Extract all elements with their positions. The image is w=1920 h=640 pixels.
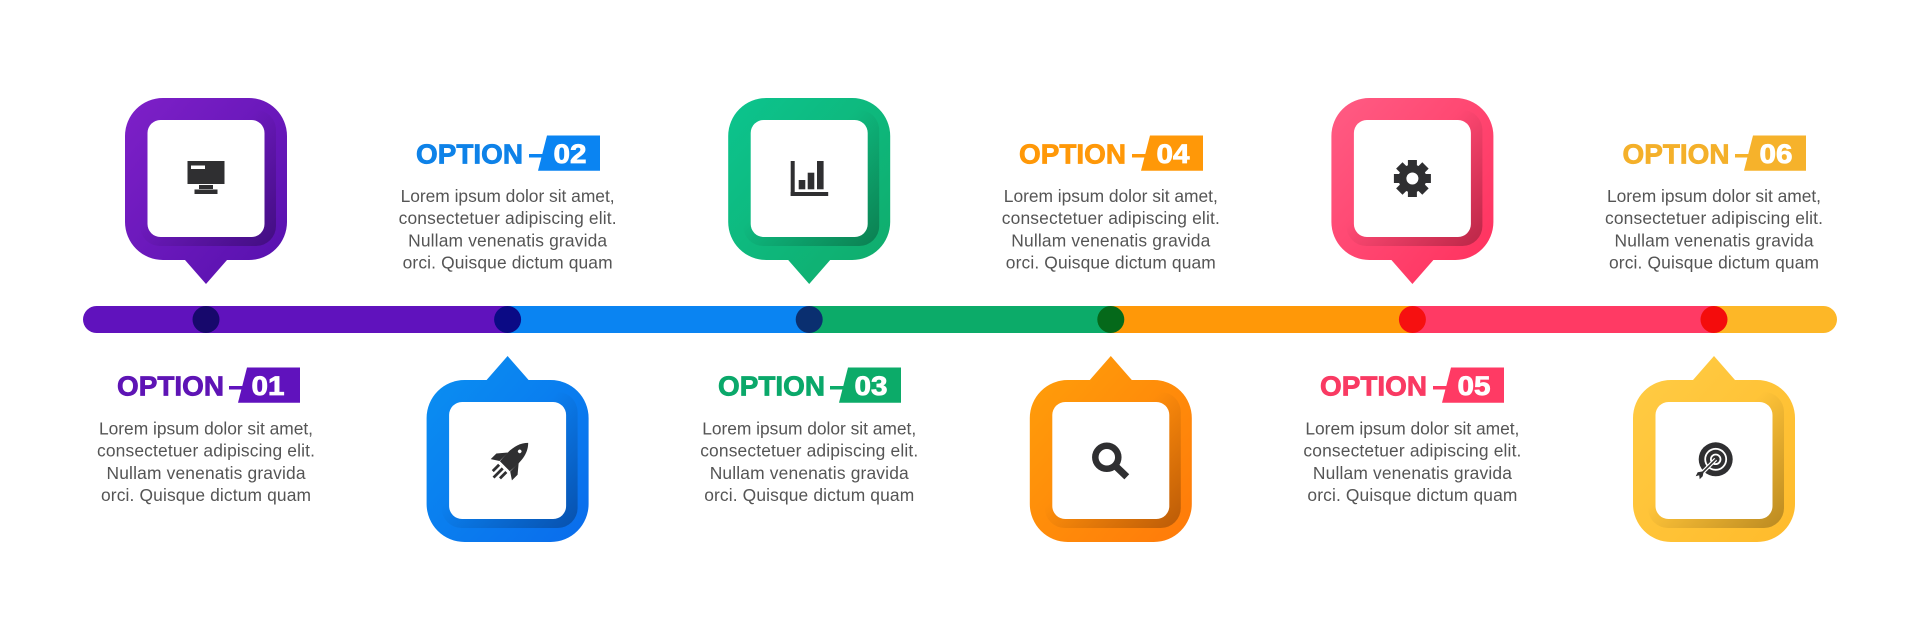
text block: option 02: Lorem ipsum dolor sit amet, xyxy=(401,186,615,206)
white card xyxy=(449,402,566,519)
text block: option 01: consectetuer adipiscing elit. xyxy=(97,441,315,461)
timeline marker 4 xyxy=(1097,306,1124,333)
pin shape xyxy=(1331,98,1493,284)
label: option 03 xyxy=(718,368,901,403)
text block: option 06: Lorem ipsum dolor sit amet, xyxy=(1607,186,1821,206)
number ribbon 04 xyxy=(1141,136,1203,171)
white card xyxy=(1052,402,1169,519)
panel: option 06 bubble xyxy=(1633,356,1795,542)
icon: rocket xyxy=(483,432,539,488)
panel: option 05 bubble xyxy=(1331,98,1493,284)
white card xyxy=(1656,402,1772,519)
text block: option 05 xyxy=(1303,418,1521,505)
connector dash 01 xyxy=(229,386,245,390)
text block: option 02: Nullam venenatis gravida xyxy=(408,230,607,250)
icon: gear xyxy=(1394,160,1431,197)
inner shadow xyxy=(743,110,879,246)
pin shape xyxy=(728,98,890,284)
label: option 04 xyxy=(1019,136,1203,171)
white card xyxy=(148,120,264,237)
text block: option 05: Nullam venenatis gravida xyxy=(1313,463,1512,483)
number ribbon 06 xyxy=(1744,136,1806,171)
panel: option 04 bubble xyxy=(1030,356,1192,542)
text block: option 03: Nullam venenatis gravida xyxy=(710,463,909,483)
panel: option 02 bubble xyxy=(427,356,589,542)
number 05: 05 xyxy=(1458,371,1490,401)
text block: option 04 xyxy=(1002,186,1220,272)
heading: option 01: OPTION xyxy=(117,370,224,401)
pin shape xyxy=(125,98,287,284)
text block: option 03 xyxy=(700,418,918,505)
text block: option 04: consectetuer adipiscing elit. xyxy=(1002,208,1220,228)
inner shadow xyxy=(442,392,578,528)
number 06: 06 xyxy=(1760,139,1792,169)
text block: option 01: Lorem ipsum dolor sit amet, xyxy=(99,418,313,438)
pin shape xyxy=(427,356,589,542)
text block: option 04: orci. Quisque dictum quam xyxy=(1006,252,1216,272)
text block: option 05: consectetuer adipiscing elit. xyxy=(1303,441,1521,461)
heading: option 06: OPTION xyxy=(1622,138,1730,169)
icon: target xyxy=(1696,442,1733,479)
number ribbon 05 xyxy=(1442,368,1504,403)
text block: option 01 xyxy=(97,418,315,505)
text block: option 03: orci. Quisque dictum quam xyxy=(704,485,914,505)
heading: option 05: OPTION xyxy=(1320,370,1427,401)
timeline marker 1 xyxy=(192,306,220,333)
number 03: 03 xyxy=(854,371,888,401)
text block: option 02 xyxy=(399,186,617,272)
timeline marker 3 xyxy=(796,306,823,333)
text block: option 05: orci. Quisque dictum quam xyxy=(1307,485,1517,505)
inner shadow xyxy=(1648,392,1784,528)
connector dash 02 xyxy=(529,154,545,158)
number 04: 04 xyxy=(1156,139,1190,169)
number 02: 02 xyxy=(554,139,586,169)
text block: option 06 xyxy=(1605,186,1823,272)
label: option 05 xyxy=(1320,368,1504,403)
text block: option 06: Nullam venenatis gravida xyxy=(1614,230,1814,250)
text block: option 05: Lorem ipsum dolor sit amet, xyxy=(1305,418,1519,438)
text block: option 06: orci. Quisque dictum quam xyxy=(1609,252,1819,272)
text block: option 02: consectetuer adipiscing elit. xyxy=(399,208,617,228)
label: option 06 xyxy=(1622,136,1806,171)
pin shape xyxy=(1030,356,1192,542)
text block: option 04: Lorem ipsum dolor sit amet, xyxy=(1004,186,1218,206)
connector dash 06 xyxy=(1735,154,1751,158)
label: option 02 xyxy=(416,136,600,171)
timeline marker 5 xyxy=(1399,306,1426,333)
text block: option 02: orci. Quisque dictum quam xyxy=(403,252,613,272)
text block: option 01: Nullam venenatis gravida xyxy=(106,463,306,483)
panel: option 03 bubble xyxy=(728,98,890,284)
number ribbon 01 xyxy=(238,368,300,403)
text block: option 03: consectetuer adipiscing elit. xyxy=(700,441,918,461)
timeline marker 6 xyxy=(1700,306,1728,333)
heading: option 02: OPTION xyxy=(416,138,523,169)
text block: option 01: orci. Quisque dictum quam xyxy=(101,485,311,505)
timeline marker 2 xyxy=(494,306,521,333)
heading: option 04: OPTION xyxy=(1019,138,1126,169)
inner shadow xyxy=(1045,392,1181,528)
text block: option 04: Nullam venenatis gravida xyxy=(1011,230,1211,250)
number 01: 01 xyxy=(252,371,284,401)
heading: option 03: OPTION xyxy=(718,370,825,401)
inner shadow xyxy=(1346,110,1482,246)
white card xyxy=(1354,120,1471,237)
timeline bar xyxy=(83,306,1837,333)
label: option 01 xyxy=(117,368,300,403)
number ribbon 03 xyxy=(839,368,901,403)
icon: bar chart xyxy=(791,161,828,196)
panel: option 01 bubble xyxy=(125,98,287,284)
text block: option 06: consectetuer adipiscing elit. xyxy=(1605,208,1823,228)
pin shape xyxy=(1633,356,1795,542)
text block: option 03: Lorem ipsum dolor sit amet, xyxy=(702,418,916,438)
inner shadow xyxy=(140,110,276,246)
connector dash 03 xyxy=(830,386,846,390)
icon: monitor xyxy=(188,161,224,194)
white card xyxy=(751,120,868,237)
connector dash 04 xyxy=(1132,154,1148,158)
icon: magnifier xyxy=(1095,446,1127,477)
connector dash 05 xyxy=(1433,386,1449,390)
number ribbon 02 xyxy=(538,136,600,171)
